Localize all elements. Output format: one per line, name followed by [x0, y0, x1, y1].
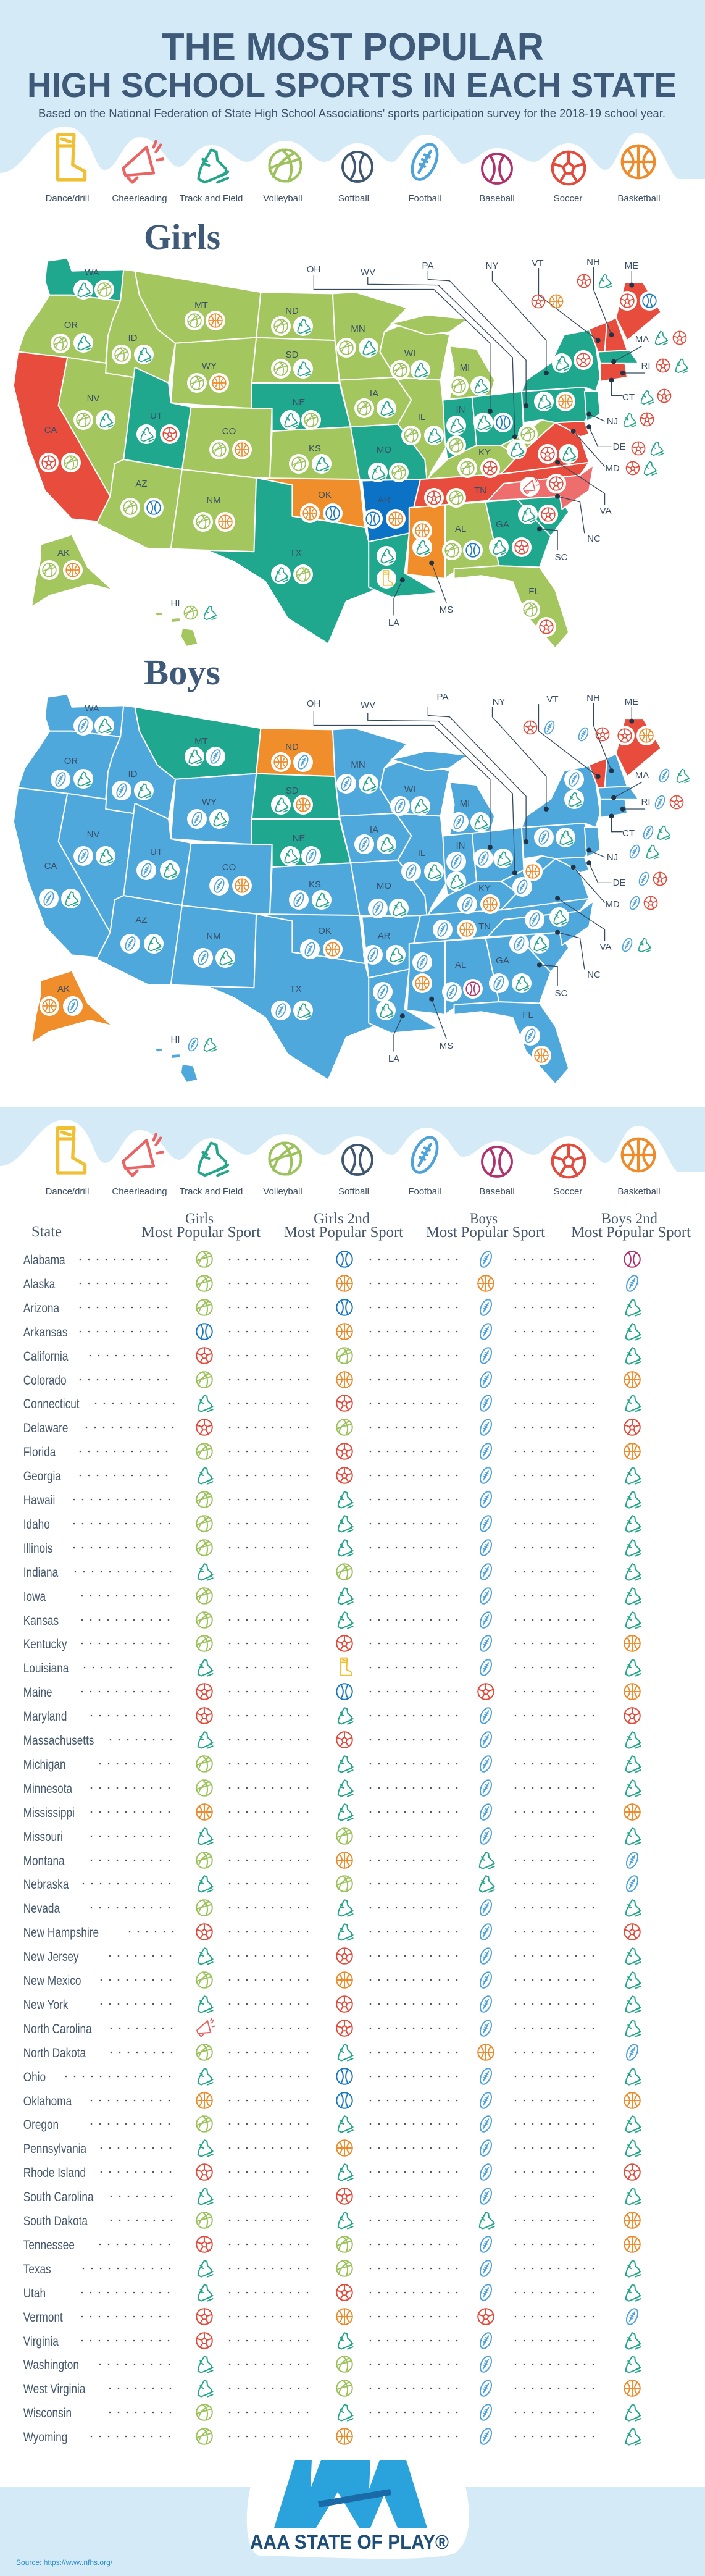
heading: Boys: Boys [144, 652, 220, 692]
row: Virginia: Virginia [23, 2335, 59, 2349]
row: Iowa [23, 1586, 641, 1606]
row: Michigan: Michigan [23, 1758, 66, 1772]
title: HIGH SCHOOL SPORTS IN EACH STATE [27, 65, 677, 104]
state labels: boys: HI [170, 1034, 180, 1045]
state labels: boys: OR [64, 756, 78, 766]
map: boys [14, 692, 689, 1084]
table header: Most Popular Sport [426, 1224, 545, 1241]
state labels: girls: TX [290, 548, 302, 558]
state labels: boys: AZ [135, 915, 148, 925]
row: New Mexico [23, 1970, 641, 1990]
row: Kentucky: Kentucky [23, 1638, 67, 1651]
state labels: girls: GA [496, 519, 509, 530]
source note: Source: https://www.nfhs.org/ [16, 2558, 113, 2567]
state labels: boys: VT [546, 694, 559, 705]
row: Alabama [23, 1249, 640, 1269]
row: Vermont [23, 2307, 640, 2326]
footer background [0, 2487, 705, 2576]
state labels: girls: MA [635, 334, 649, 345]
row: California: California [23, 1350, 69, 1364]
row: Mississippi [23, 1802, 640, 1822]
state labels: boys: WA [85, 703, 99, 714]
row: Texas: Texas [23, 2263, 51, 2276]
row: Minnesota: Minnesota [23, 1782, 72, 1796]
header background [0, 0, 705, 180]
row: Rhode Island: Rhode Island [23, 2167, 86, 2180]
state labels: girls: WA [85, 267, 99, 278]
row: Massachusetts: Massachusetts [23, 1734, 94, 1748]
state labels: girls: MD [605, 463, 620, 474]
map icons: girls [39, 274, 688, 637]
row: Alaska: Alaska [23, 1278, 56, 1291]
row: Wisconsin: Wisconsin [23, 2407, 72, 2420]
state labels: girls: LA [388, 618, 399, 628]
row: Wyoming [23, 2427, 641, 2446]
state labels: girls: RI [641, 361, 651, 371]
row: Montana [23, 1850, 640, 1870]
state labels: girls: NY [486, 261, 498, 271]
state labels: girls: IN [456, 405, 465, 415]
row: North Carolina: North Carolina [23, 2023, 92, 2036]
state labels: girls: CT [622, 392, 635, 403]
row: Colorado [23, 1370, 640, 1390]
row: Kansas: Kansas [23, 1614, 59, 1628]
row: Rhode Island [23, 2162, 640, 2182]
row: Maryland: Maryland [23, 1710, 67, 1724]
state labels: girls: OH [307, 264, 320, 275]
state labels: boys: FL [522, 1010, 533, 1020]
row: Utah [23, 2283, 641, 2302]
title: THE MOST POPULAR [162, 26, 544, 69]
row: Louisiana [23, 1658, 641, 1677]
table header: Most Popular Sport [141, 1224, 261, 1241]
state labels: boys: NV [87, 829, 99, 840]
state labels: boys: OK [318, 926, 332, 936]
state labels: boys: NM [206, 931, 221, 942]
row: Maine: Maine [23, 1686, 52, 1700]
row: Maryland [23, 1706, 640, 1726]
state labels: boys: CA [44, 861, 57, 871]
row: Pennsylvania [23, 2138, 641, 2158]
table header: Boys 2nd [601, 1210, 657, 1227]
row: Nebraska [23, 1874, 640, 1894]
table header: Girls [185, 1210, 214, 1227]
subtitle: Based on the National Federation of State High School Associations' sports participation survey for the 2018-19 school year. [38, 107, 665, 120]
table header: State [31, 1223, 62, 1240]
row: California [23, 1346, 641, 1366]
row: New Hampshire [23, 1922, 640, 1942]
row: Utah: Utah [23, 2287, 46, 2301]
row: South Dakota: South Dakota [23, 2215, 88, 2228]
state labels: girls: CA [44, 425, 57, 435]
state labels: boys: VA [600, 942, 611, 952]
state labels: girls: VT [532, 258, 544, 269]
state labels: boys: SC [555, 988, 568, 999]
row: West Virginia [23, 2378, 640, 2398]
heading: Girls: Girls [144, 217, 220, 257]
state labels: boys: ID [128, 769, 138, 779]
row: Ohio [23, 2066, 641, 2086]
row: Washington [23, 2354, 641, 2374]
state labels: boys: ND [285, 742, 299, 752]
state labels: girls: VA [600, 506, 611, 516]
state labels: girls: ME [625, 261, 638, 271]
row: Arizona: Arizona [23, 1302, 59, 1315]
row: West Virginia: West Virginia [23, 2383, 86, 2396]
row: South Carolina [23, 2186, 641, 2206]
state labels: girls: FL [528, 586, 540, 597]
logo: AAA State of Play: AAA STATE OF PLAY® [250, 2531, 449, 2553]
state labels: boys: OH [307, 699, 320, 709]
row: Florida [23, 1441, 640, 1461]
state labels: girls: IL [418, 412, 425, 422]
row: Oklahoma: Oklahoma [23, 2095, 72, 2108]
map: girls [14, 257, 688, 648]
row: New York: New York [23, 1999, 69, 2012]
state labels: girls: NE [293, 397, 305, 408]
row: Georgia: Georgia [23, 1470, 61, 1483]
state labels: boys: UT [150, 847, 162, 857]
row: Illinois [23, 1538, 641, 1558]
row: New Hampshire: New Hampshire [23, 1926, 99, 1940]
state labels: girls [44, 257, 651, 628]
state labels: girls: UT [150, 411, 162, 421]
state labels: girls: TN [474, 485, 486, 496]
row: Florida: Florida [23, 1446, 56, 1459]
state labels: girls: SC [555, 552, 568, 563]
row: Delaware [23, 1417, 640, 1437]
row: Montana: Montana [23, 1855, 65, 1868]
row: Oregon [23, 2114, 641, 2134]
state labels: girls: NH [586, 257, 600, 267]
row: Georgia [23, 1466, 641, 1485]
state labels: boys [44, 692, 651, 1064]
row: Arkansas: Arkansas [23, 1326, 67, 1340]
logo: AAA State of Play [247, 2449, 469, 2559]
row: Connecticut [23, 1393, 641, 1413]
row: Colorado: Colorado [23, 1374, 67, 1388]
row: Pennsylvania: Pennsylvania [23, 2142, 86, 2156]
state labels: girls: OK [318, 490, 332, 500]
state labels: girls: WI [404, 348, 415, 359]
row: Illinois: Illinois [23, 1542, 53, 1556]
row: Kentucky [23, 1634, 640, 1653]
row: Virginia [23, 2331, 641, 2351]
table header: Boys [470, 1210, 498, 1227]
row: Ohio: Ohio [23, 2071, 46, 2084]
row: Kansas [23, 1610, 641, 1630]
row: Alabama: Alabama [23, 1254, 65, 1267]
row: South Dakota [23, 2212, 640, 2229]
state labels: girls: HI [170, 598, 180, 609]
state labels: boys: IA [370, 824, 378, 835]
row: Minnesota [23, 1778, 641, 1798]
state labels: girls: DE [613, 442, 625, 452]
row: Nevada [23, 1898, 641, 1918]
row: Arizona [23, 1298, 641, 1317]
title [27, 26, 677, 104]
state labels: boys: MT [194, 736, 208, 747]
row: Iowa: Iowa [23, 1590, 46, 1604]
row: Vermont: Vermont [23, 2311, 63, 2325]
row: Tennessee [23, 2234, 640, 2254]
row: Idaho: Idaho [23, 1518, 50, 1532]
state labels: girls: OR [64, 320, 78, 330]
row: Louisiana: Louisiana [23, 1662, 69, 1676]
state labels: boys: AK [57, 984, 70, 994]
row: North Carolina [23, 2018, 641, 2038]
state labels: girls: NM [206, 495, 221, 506]
row: Washington: Washington [23, 2359, 79, 2372]
row: Indiana [23, 1562, 641, 1582]
row: Oklahoma [23, 2091, 640, 2110]
state labels: girls: NC [587, 534, 601, 544]
table header: Girls 2nd [314, 1210, 370, 1227]
state labels: boys: TN [478, 921, 491, 932]
row: North Dakota [23, 2042, 640, 2062]
state labels: girls: KS [309, 443, 321, 454]
state labels: boys: KY [478, 883, 491, 894]
state labels: boys: WI [404, 784, 415, 795]
state labels: boys: TX [290, 984, 302, 994]
row: North Dakota: North Dakota [23, 2047, 86, 2060]
row: Connecticut: Connecticut [23, 1398, 80, 1411]
state labels: girls: NV [87, 393, 99, 404]
state labels: boys: GA [496, 955, 509, 966]
row: Oregon: Oregon [23, 2118, 59, 2132]
state labels: boys: AR [378, 931, 391, 941]
state labels: girls: ID [128, 333, 138, 343]
state labels: boys: CT [622, 828, 635, 839]
state labels: girls: AZ [135, 479, 148, 489]
state labels: boys: WV [361, 700, 375, 710]
state labels: girls: MS [440, 605, 453, 615]
row: Wisconsin [23, 2402, 641, 2422]
state labels: boys: RI [641, 797, 651, 807]
state labels: boys: NY [493, 697, 505, 707]
state labels: girls: CO [222, 426, 236, 437]
state labels: boys: CO [222, 862, 236, 873]
row: Hawaii [23, 1490, 641, 1509]
state labels: girls: WY [202, 361, 217, 371]
row: Texas [23, 2259, 641, 2278]
state labels: boys: MS [440, 1041, 453, 1051]
table rows [23, 1249, 641, 2446]
state labels: boys: IN [456, 841, 465, 851]
row: Michigan [23, 1754, 641, 1774]
row: New York [23, 1994, 641, 2014]
row: Hawaii: Hawaii [23, 1494, 55, 1508]
state labels: boys: NE [293, 833, 305, 844]
state labels: girls: MN [351, 324, 365, 334]
state labels: girls: AK [57, 548, 70, 558]
state labels: girls: WV [361, 267, 375, 277]
state labels: boys: MN [351, 760, 365, 770]
row: New Jersey [23, 1946, 641, 1966]
state labels: boys: ME [625, 697, 638, 707]
state labels: boys: DE [613, 878, 625, 888]
state labels: boys: LA [388, 1054, 399, 1064]
state labels: girls: ND [285, 306, 299, 316]
state labels: boys: IL [418, 848, 425, 858]
state labels: girls: IA [370, 388, 378, 399]
state labels: boys: MD [605, 899, 620, 910]
row: Idaho [23, 1514, 641, 1533]
state labels: boys: AL [455, 960, 466, 970]
row: Missouri [23, 1826, 641, 1846]
state labels: girls: NJ [607, 416, 618, 427]
row: Mississippi: Mississippi [23, 1806, 75, 1820]
state labels: boys: KS [309, 879, 321, 890]
state labels: boys: MA [635, 770, 649, 781]
row: Wyoming: Wyoming [23, 2431, 67, 2444]
row: Delaware: Delaware [23, 1422, 68, 1435]
state labels: girls: AR [378, 495, 391, 505]
state labels: girls: MI [460, 363, 470, 373]
state labels: boys: MO [377, 881, 391, 891]
row: Massachusetts [23, 1730, 641, 1750]
state labels: girls: MT [194, 300, 208, 311]
row: Nebraska: Nebraska [23, 1878, 69, 1892]
table header: Most Popular Sport [284, 1224, 403, 1241]
row: Nevada: Nevada [23, 1902, 60, 1916]
state labels: boys: NH [586, 693, 600, 703]
state labels: girls: AL [455, 524, 466, 534]
state labels: girls: KY [478, 447, 491, 458]
table header: Most Popular Sport [571, 1224, 691, 1241]
row: New Mexico: New Mexico [23, 1974, 81, 1988]
row: South Carolina: South Carolina [23, 2191, 94, 2204]
state labels: boys: WY [202, 797, 217, 807]
legend band: bottom [0, 1107, 705, 1197]
state labels: girls: SD [286, 350, 299, 360]
state labels: boys: NC [587, 970, 601, 980]
map icons: boys [39, 716, 689, 1065]
table header [31, 1210, 691, 1241]
row: Missouri: Missouri [23, 1831, 63, 1844]
state labels: girls: MO [377, 445, 391, 455]
row: Indiana: Indiana [23, 1566, 58, 1580]
state labels: boys: MI [460, 799, 470, 809]
state labels: boys: SD [286, 786, 299, 796]
row: Arkansas [23, 1322, 641, 1341]
state labels: boys: NJ [607, 852, 618, 863]
row: Maine [23, 1684, 640, 1700]
state labels: girls: PA [422, 261, 433, 271]
row: Tennessee: Tennessee [23, 2239, 75, 2252]
legend: top [0, 127, 705, 204]
state labels: boys: PA [437, 692, 448, 702]
row: Alaska [23, 1273, 640, 1293]
row: New Jersey: New Jersey [23, 1950, 79, 1964]
